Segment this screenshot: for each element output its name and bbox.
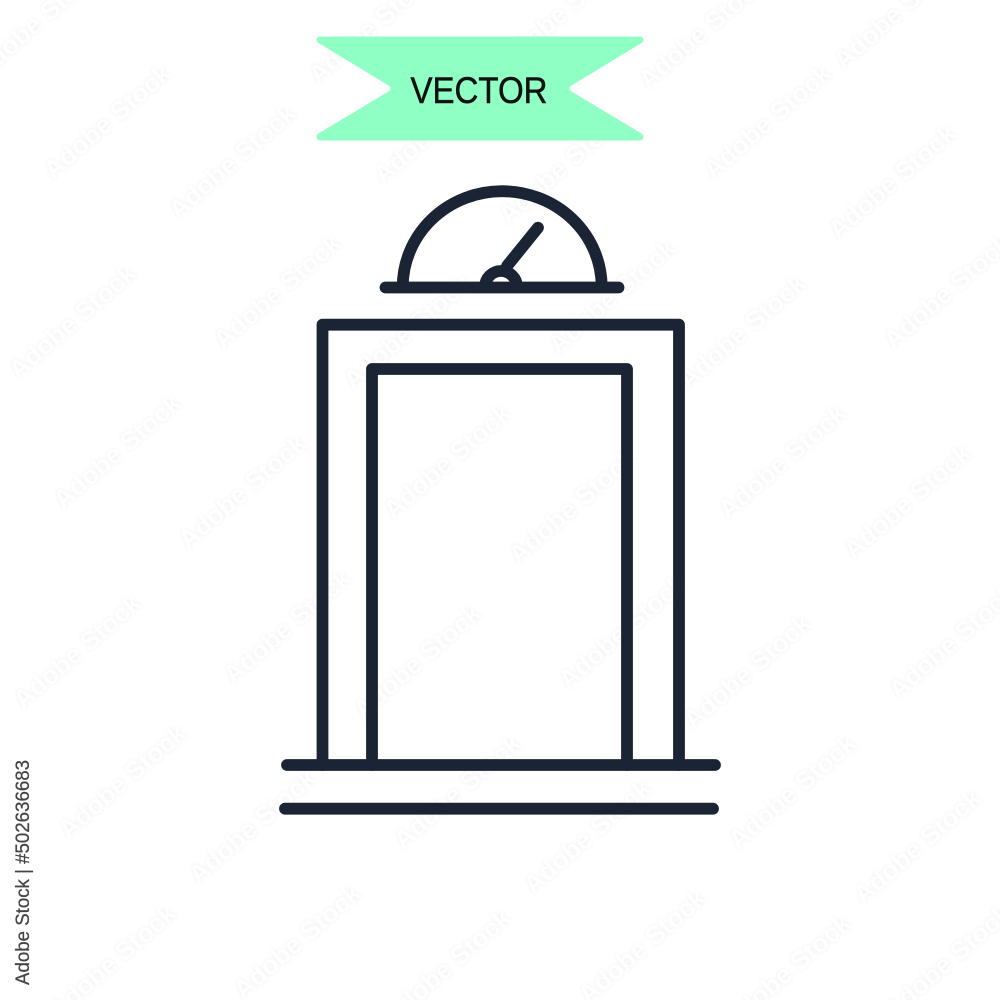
- watermark pattern: Adobe Stock: [337, 267, 477, 395]
- watermark pattern: Adobe Stock: [677, 607, 817, 735]
- ribbon banner: [317, 36, 643, 140]
- watermark pattern: Adobe Stock: [7, 587, 147, 715]
- watermark pattern: Adobe Stock: [2, 257, 142, 385]
- watermark pattern: Adobe Stock: [47, 387, 187, 515]
- watermark pattern: Adobe Stock: [492, 102, 632, 230]
- watermark pattern: Adobe Stock: [847, 782, 987, 910]
- watermark pattern: Adobe Stock: [367, 62, 507, 190]
- watermark pattern: Adobe Stock: [347, 597, 487, 725]
- watermark pattern: Adobe Stock: [172, 427, 312, 555]
- watermark pattern: Adobe Stock: [217, 562, 357, 690]
- watermark pattern: Adobe Stock: [517, 772, 657, 900]
- lower floor line: [285, 803, 713, 815]
- icon: floor indicator gauge: [386, 191, 618, 288]
- watermark pattern: Adobe Stock: [182, 762, 322, 890]
- watermark pattern: Adobe Stock: [697, 57, 837, 185]
- vertical stock id text: Adobe Stock | #502636683: [13, 760, 34, 985]
- watermark pattern: Adobe Stock: [837, 437, 977, 565]
- watermark pattern: Adobe Stock: [502, 442, 642, 570]
- watermark pattern: Adobe Stock: [542, 232, 682, 360]
- watermark pattern: Adobe Stock: [162, 97, 302, 225]
- icon: elevator: [285, 191, 715, 809]
- ribbon label: VECTOR: [410, 70, 548, 111]
- watermark pattern: Adobe Stock: [52, 717, 192, 845]
- watermark pattern: Adobe Stock: [822, 117, 962, 245]
- elevator outer frame: [322, 325, 679, 765]
- watermark pattern: Adobe Stock: [722, 727, 862, 855]
- watermark pattern: Adobe Stock: [207, 227, 347, 355]
- ribbon shape: [317, 36, 643, 140]
- watermark pattern: Adobe Stock: [712, 397, 852, 525]
- watermark pattern: Adobe Stock: [37, 57, 177, 185]
- watermark pattern: Adobe Stock: [552, 567, 692, 695]
- watermark pattern: Adobe Stock: [387, 727, 527, 855]
- elevator door: [372, 369, 627, 765]
- watermark pattern: Adobe Stock: [377, 397, 517, 525]
- watermark pattern: Adobe Stock: [672, 267, 812, 395]
- floor line: [287, 759, 715, 771]
